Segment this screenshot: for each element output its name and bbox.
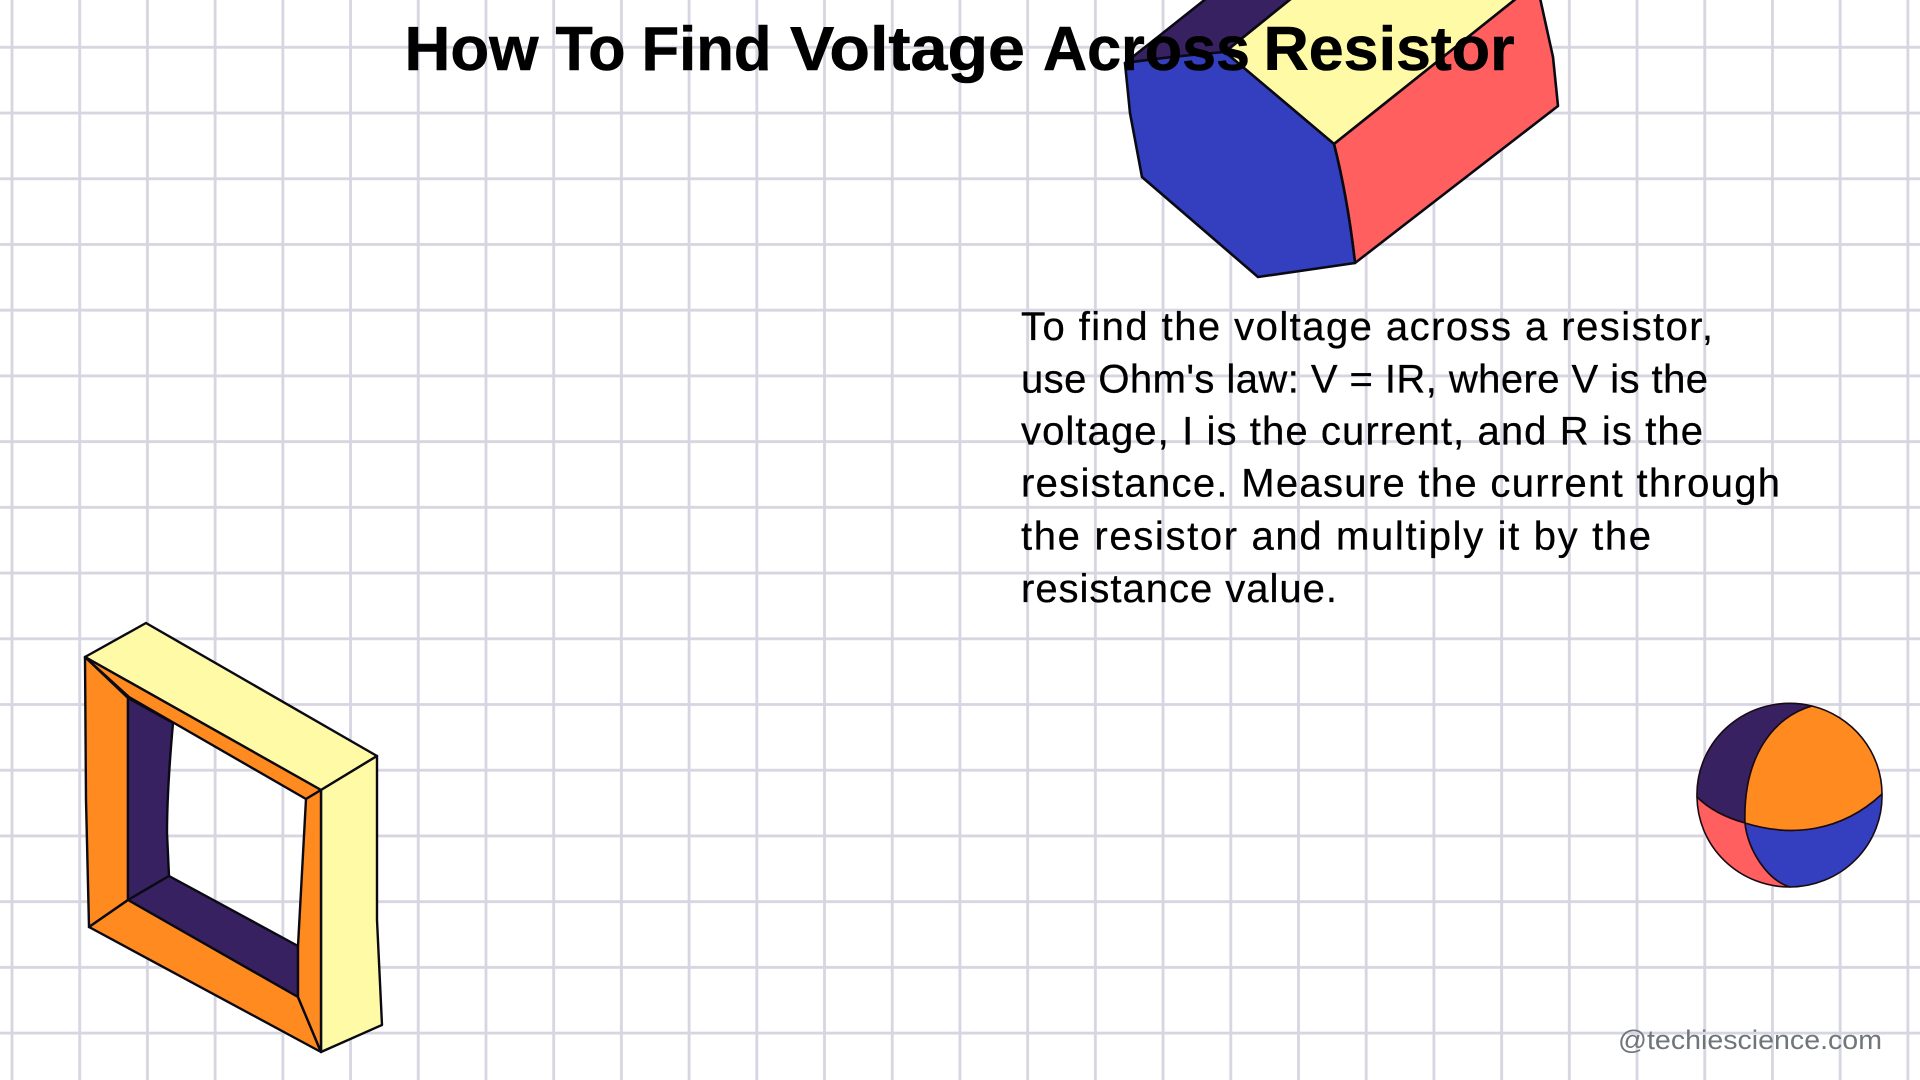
title word: Voltage: Voltage [790,15,1025,84]
title word: To: To [556,15,626,84]
icon: 3D hexagonal prism, top right [1125,0,1558,277]
watermark: @techiescience.com [1618,1025,1882,1055]
body line 2: use Ohm's law: V = IR, where V is the [1021,358,1708,402]
title word: Find: Find [642,15,772,84]
sphere red segment [1697,797,1790,887]
icon: 3D square frame, bottom left [85,623,382,1052]
prism blue face [1125,52,1355,277]
title word: Across: Across [1043,15,1250,84]
body line 1: To find the voltage across a resistor, [1021,305,1713,349]
prism yellow face [1225,0,1517,144]
frame orange inner top strip [85,657,321,799]
prism purple face [1125,0,1292,63]
body text block [1021,305,1780,611]
frame purple inner left face [128,698,173,900]
frame orange bottom face [89,900,321,1052]
body line 3: voltage, I is the current, and R is the [1021,410,1703,454]
frame yellow top face [85,623,377,790]
title word: Resistor: Resistor [1264,15,1514,84]
frame orange left face [85,657,128,927]
frame orange right face [298,790,321,1052]
body line 6: resistance value. [1021,567,1337,611]
sphere blue segment [1745,794,1882,887]
sphere orange segment [1745,706,1882,830]
prism red face [1334,0,1558,263]
body line 4: resistance. Measure the current through [1021,462,1780,506]
body line 5: the resistor and multiply it by the [1021,514,1651,558]
frame purple inner bottom face [128,876,298,997]
sphere purple segment [1697,703,1812,823]
frame yellow right face [321,756,382,1052]
icon: segmented sphere, bottom right [1697,703,1882,887]
title [404,15,1514,84]
title word: How: How [404,15,539,84]
